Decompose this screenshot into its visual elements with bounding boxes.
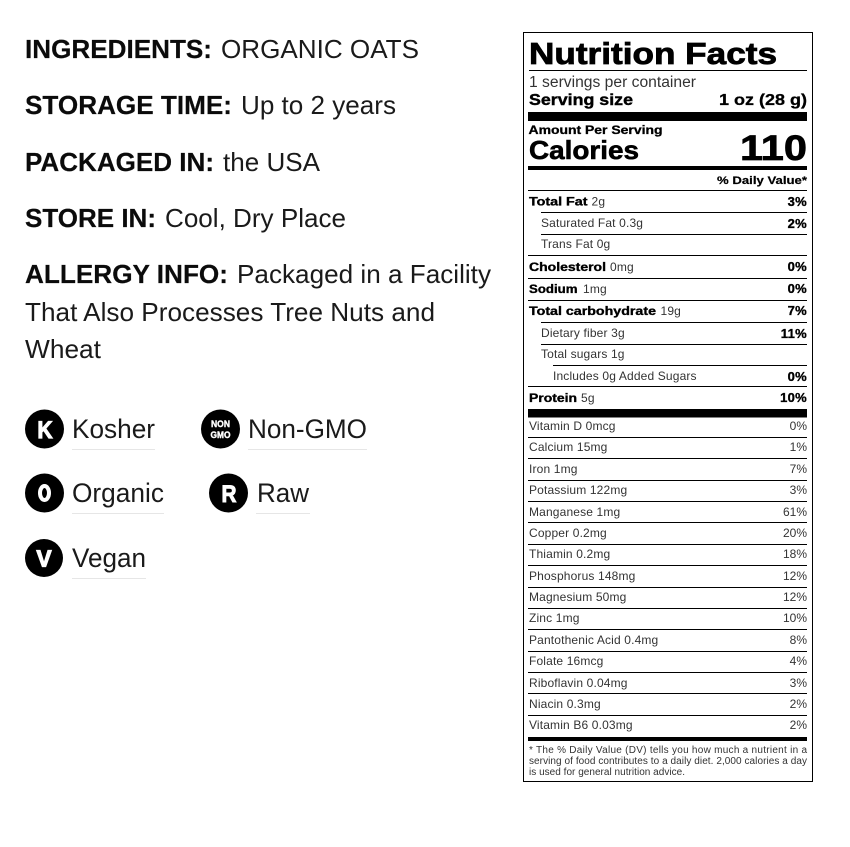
row: phosphorus: Phosphorus 148mg	[529, 569, 635, 583]
row: added sugars: 0%	[788, 369, 807, 384]
row: manganese	[529, 505, 807, 519]
row: manganese: Manganese 1mg	[529, 505, 620, 519]
footnote	[529, 745, 807, 778]
row: vitamin D: 0%	[790, 419, 807, 433]
badge: Raw: R	[222, 481, 236, 508]
row: magnesium: 12%	[783, 590, 807, 604]
row: phosphorus: 12%	[783, 569, 807, 583]
badge: Kosher	[25, 410, 155, 450]
row: protein: 10%	[780, 390, 807, 405]
row: protein	[529, 390, 807, 405]
row: sodium	[529, 281, 807, 296]
row: cholesterol	[529, 259, 807, 274]
row: trans fat: Trans Fat 0g	[541, 237, 610, 251]
row: copper: 20%	[783, 526, 807, 540]
row: total carbohydrate: 19g	[660, 304, 681, 318]
row: thiamin: Thiamin 0.2mg	[529, 547, 610, 561]
row: folate: Folate 16mcg	[529, 654, 604, 668]
row: cholesterol: 0mg	[610, 260, 634, 274]
row: iron	[529, 462, 807, 476]
row: zinc	[529, 611, 807, 625]
row: folate: 4%	[790, 654, 807, 668]
badge: Kosher: Kosher	[72, 414, 155, 444]
badge: Non-GMO: NON	[211, 419, 230, 430]
row: total fat: 3%	[788, 194, 807, 209]
calories section: Amount Per Serving	[528, 125, 662, 137]
store in line	[25, 203, 346, 233]
row: cholesterol: 0%	[788, 259, 807, 274]
packaged in line: the USA	[223, 147, 321, 177]
row: iron: 7%	[790, 462, 807, 476]
row: vitamin B6: 2%	[790, 718, 807, 732]
storage time line: STORAGE TIME:	[25, 90, 232, 120]
badge: Non-GMO: Non-GMO	[248, 414, 367, 444]
calories section: 110	[740, 129, 807, 168]
badge: Vegan: Vegan	[72, 543, 146, 573]
row: thiamin: 18%	[783, 547, 807, 561]
row: protein: Protein	[529, 391, 577, 405]
badge: Kosher: K	[38, 417, 53, 444]
row: cholesterol: Cholesterol	[529, 260, 606, 274]
row: calcium: Calcium 15mg	[529, 440, 608, 454]
calories section: % Daily Value*	[717, 175, 808, 187]
row: vitamin D: Vitamin D 0mcg	[529, 419, 616, 433]
diet badges	[25, 410, 367, 579]
row: zinc: 10%	[783, 611, 807, 625]
serving information	[528, 70, 807, 121]
calories section	[528, 125, 808, 191]
badge: Raw	[209, 474, 310, 514]
row: magnesium	[529, 590, 807, 604]
row: vitamin B6: Vitamin B6 0.03mg	[529, 718, 633, 732]
row: pantothenic acid: Pantothenic Acid 0.4mg	[529, 633, 658, 647]
row: saturated fat	[541, 216, 807, 231]
allergy info paragraph: ALLERGY INFO:	[25, 259, 228, 289]
row: calcium: 1%	[790, 440, 807, 454]
row: riboflavin	[529, 676, 807, 690]
row: iron: Iron 1mg	[529, 462, 578, 476]
row: niacin	[529, 697, 807, 711]
text block: product information	[25, 34, 491, 364]
row: riboflavin: 3%	[790, 676, 807, 690]
packaged in line: PACKAGED IN:	[25, 147, 214, 177]
row: magnesium: Magnesium 50mg	[529, 590, 626, 604]
panel: nutrition facts label	[524, 32, 812, 782]
heading: Nutrition Facts: Nutrition Facts	[529, 36, 777, 71]
table: macronutrients	[528, 194, 807, 418]
row: dietary fiber: Dietary fiber 3g	[541, 326, 625, 340]
allergy info paragraph: Packaged in a Facility	[237, 259, 491, 289]
row: pantothenic acid: 8%	[790, 633, 807, 647]
row: copper: Copper 0.2mg	[529, 526, 607, 540]
row: potassium: Potassium 122mg	[529, 483, 627, 497]
footnote: serving of food contributes to a daily diet. 2,000 calories a day	[529, 756, 807, 767]
row: saturated fat: 2%	[788, 216, 807, 231]
badge: Vegan	[25, 539, 146, 579]
store in line: Cool, Dry Place	[165, 203, 346, 233]
row: total fat: Total Fat	[529, 194, 588, 208]
row: total carbohydrate: 7%	[788, 303, 807, 318]
row: niacin: 2%	[790, 697, 807, 711]
row: dietary fiber	[541, 326, 807, 341]
badge: Vegan: V	[36, 546, 52, 572]
row: thiamin	[529, 547, 807, 561]
row: added sugars	[553, 369, 807, 384]
row: protein: 5g	[581, 391, 595, 405]
row: dietary fiber: 11%	[781, 326, 807, 341]
ingredients line: ORGANIC OATS	[221, 34, 419, 64]
row: manganese: 61%	[783, 505, 807, 519]
row: potassium	[529, 483, 807, 497]
row: copper	[529, 526, 807, 540]
allergy info paragraph: Wheat	[25, 334, 102, 364]
allergy info paragraph	[25, 259, 491, 364]
badge: Non-GMO	[201, 410, 367, 450]
storage time line	[25, 90, 396, 120]
badge: Non-GMO: GMO	[210, 430, 230, 441]
ingredients line: INGREDIENTS:	[25, 34, 212, 64]
serving information: 1 servings per container	[529, 74, 696, 91]
row: riboflavin: Riboflavin 0.04mg	[529, 676, 628, 690]
badge: Organic: Organic	[72, 478, 164, 508]
row: total fat: 2g	[592, 194, 605, 208]
row: vitamin D	[529, 419, 807, 433]
ingredients line	[25, 34, 419, 64]
row: phosphorus	[529, 569, 807, 583]
badge: Organic	[25, 474, 164, 514]
calories section: Calories	[529, 135, 639, 165]
row: sodium: 0%	[788, 281, 807, 296]
row: total carbohydrate: Total carbohydrate	[529, 304, 656, 318]
serving information: Serving size	[529, 92, 633, 109]
row: total sugars: Total sugars 1g	[541, 347, 625, 361]
row: niacin: Niacin 0.3mg	[529, 697, 601, 711]
serving information: 1 oz (28 g)	[719, 92, 807, 109]
store in line: STORE IN:	[25, 203, 156, 233]
row: sodium: 1mg	[583, 282, 607, 296]
row: total carbohydrate	[529, 303, 807, 318]
row: calcium	[529, 440, 807, 454]
row: zinc: Zinc 1mg	[529, 611, 580, 625]
row: pantothenic acid	[529, 633, 807, 647]
row: added sugars: Includes 0g Added Sugars	[553, 369, 697, 383]
packaged in line	[25, 147, 321, 177]
footnote: * The % Daily Value (DV) tells you how much a nutrient in a	[529, 745, 807, 756]
row: folate	[529, 654, 807, 668]
row: potassium: 3%	[790, 483, 807, 497]
badge: Raw: Raw	[257, 478, 309, 508]
allergy info paragraph: That Also Processes Tree Nuts and	[25, 297, 435, 327]
row: sodium: Sodium	[529, 282, 578, 296]
row: saturated fat: Saturated Fat 0.3g	[541, 216, 643, 230]
footnote: is used for general nutrition advice.	[529, 767, 685, 778]
storage time line: Up to 2 years	[241, 90, 396, 120]
row: vitamin B6	[529, 718, 807, 732]
table: vitamins and minerals	[528, 419, 807, 741]
row: total fat	[529, 194, 807, 209]
